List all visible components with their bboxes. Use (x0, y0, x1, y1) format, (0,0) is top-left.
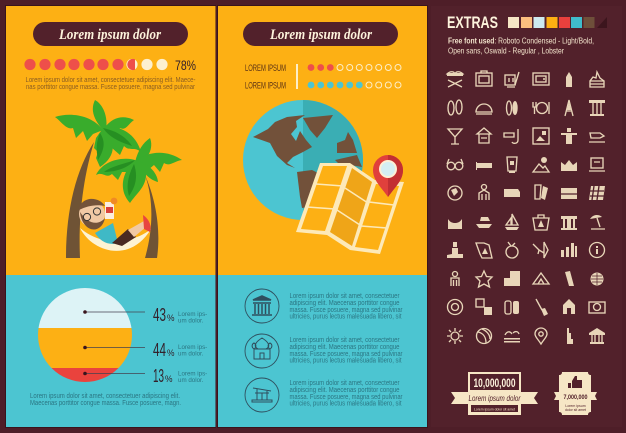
illustration: palm trees and hammock (55, 100, 182, 258)
callout 43%: um dolor. (178, 318, 204, 324)
icon: swimmer (504, 332, 520, 342)
heading pill middle (243, 22, 398, 46)
intro text: Lorem ipsum dolor sit amet, consectetuer adipiscing elit. Maece- (26, 77, 196, 84)
icon: bed (476, 162, 492, 170)
badge: 7,000,000 thumbs up: Lorem ipsum (565, 404, 586, 408)
feature row: torii gate: massa. Fusce posuere, magna sed pulvinar (290, 394, 403, 401)
icon: hotel (560, 188, 578, 199)
icon: photo (533, 128, 549, 144)
callout 43%: Lorem ips- (178, 311, 207, 318)
pie caption (30, 393, 181, 407)
feature row: temple: adipiscing elit. Maecenas porttitor congue (290, 300, 400, 307)
callout 44% (83, 340, 207, 360)
font note: Free font used: Roboto Condensed - Light/Bold, (448, 36, 594, 46)
icon: camera (589, 302, 605, 313)
heading pill left (33, 22, 188, 46)
badge: 7,000,000 thumbs up: 7,000,000 (564, 394, 588, 401)
icon: torii (561, 216, 577, 230)
intro text (26, 77, 196, 91)
icon: column (589, 100, 605, 116)
icon: apartment block (504, 271, 520, 286)
progress dots 78% (24, 57, 196, 73)
icon: starfish (476, 271, 492, 287)
icon: tent (533, 273, 549, 284)
icon: sunscreen (507, 157, 517, 173)
icon: sandals (506, 101, 518, 115)
callout 13%: Lorem ips- (178, 370, 207, 378)
heading pill middle: Lorem ipsum dolor (269, 27, 372, 43)
callout 44%: um dolor. (178, 350, 204, 358)
icon: church (563, 299, 575, 314)
feature row: temple (245, 289, 403, 323)
icon: dice (476, 299, 492, 315)
icon: hut (477, 128, 491, 143)
icon: boat on water (589, 133, 605, 142)
icon grid (447, 71, 605, 344)
icon: road sign (536, 299, 548, 316)
pie chart (38, 288, 132, 383)
icon: life ring (448, 300, 462, 314)
feature row: torii gate: ultricies, purus lectus malesuada libero, sit (290, 400, 402, 408)
dot rating rows: LOREM IPSUM (245, 63, 286, 73)
icon: safe (533, 73, 549, 85)
man (79, 198, 151, 246)
callout 43%: 43 (153, 305, 166, 325)
progress dots 78%: 78% (175, 57, 196, 73)
icon: cards (476, 243, 492, 258)
feature row: cathedral: massa. Fusce posuere, magna sed pulvinar (290, 351, 403, 358)
icon: liberty statue (567, 328, 573, 344)
callout 44%: % (167, 348, 174, 358)
intro text: nas porttitor congue massa. Fusce posuere, magna sed pulvinar (26, 84, 196, 91)
icon: location pin (373, 155, 403, 197)
icon: globe pin (448, 186, 462, 200)
callout 43% (83, 305, 207, 325)
feature row: torii gate: Lorem ipsum dolor sit amet, consectetuer (290, 380, 400, 387)
icon: worker (451, 272, 459, 286)
icon: eiffel tower (565, 100, 573, 116)
feature row: temple: ultricies, purus lectus malesuada libero, sit (290, 314, 402, 320)
badge: 7,000,000 thumbs up: dolor sit amet (565, 408, 586, 412)
callout 13%: 13 (153, 366, 164, 386)
callout 43%: % (167, 313, 174, 323)
icon: cocktail (448, 129, 462, 144)
panel: middle (217, 5, 428, 428)
callout 44%: 44 (153, 340, 166, 360)
icon: tickets (535, 185, 548, 200)
callout 13%: um dolor. (178, 377, 204, 384)
dot rating rows: LOREM IPSUM (245, 80, 286, 90)
feature row: temple: massa. Fusce posuere, magna sed pulvinar (290, 307, 403, 314)
icon: beach umbrella (590, 215, 605, 229)
icon: globe (590, 272, 604, 286)
icon: flip flops (448, 100, 462, 115)
feature row: cathedral: adipiscing elit. Maecenas porttitor congue (290, 344, 400, 351)
icon: bus (504, 189, 520, 197)
callout 13% (83, 366, 207, 386)
icon: castle (561, 160, 577, 171)
panel: extras (431, 6, 622, 427)
badge: 10,000,000: Lorem ipsum dolor (468, 394, 521, 403)
icon: palace (590, 72, 604, 87)
feature row: cathedral: ultricies, purus lectus malesuada libero, sit (290, 358, 402, 364)
callout 13%: % (165, 374, 172, 384)
hammock (80, 228, 151, 251)
icon: diving tanks (505, 301, 519, 314)
icon: snorkel (504, 129, 518, 143)
icon: glasses (447, 159, 463, 170)
extras heading: EXTRAS (447, 14, 498, 32)
badge: 7,000,000 thumbs up (554, 372, 597, 415)
icon: mosque (448, 219, 462, 229)
feature row: cathedral: Lorem ipsum dolor sit amet, consectetuer (290, 337, 400, 344)
callout 44%: Lorem ips- (178, 344, 207, 351)
icon: luggage cart (505, 72, 519, 87)
badge: 10,000,000 (451, 372, 538, 415)
pie caption: Maecenas porttitor congue massa. Fusce posuere, magn. (30, 400, 181, 407)
panel: left (5, 5, 216, 428)
icon: laptop (589, 158, 605, 171)
feature row: torii gate (245, 378, 403, 412)
icon: beach ball (476, 328, 492, 344)
feature row: torii gate: adipiscing elit. Maecenas porttitor congue (290, 387, 400, 394)
feature row: temple: Lorem ipsum dolor sit amet, consectetuer (290, 293, 400, 300)
colour swatches (508, 17, 607, 28)
font note (448, 36, 594, 56)
feature row: cathedral (245, 334, 403, 368)
icon: map marker (535, 328, 547, 344)
icon: fruit (506, 242, 518, 258)
dot rating rows (245, 63, 401, 90)
icon: guard (447, 242, 463, 258)
icon: plate and cutlery (533, 102, 549, 114)
icon: sun (447, 328, 463, 344)
font note: Open sans, Oswald - Regular , Lobster (448, 46, 564, 56)
icon: christ statue (561, 128, 577, 144)
icon: temple (589, 328, 605, 344)
icon: cruise ship (476, 217, 492, 228)
icon: person (479, 184, 489, 200)
icon: city buildings (561, 243, 577, 257)
icon: fish (533, 242, 548, 258)
icon: mountains (533, 157, 549, 172)
icon: suitcase (476, 71, 492, 86)
heading pill left: Lorem ipsum dolor (58, 27, 161, 43)
icon: tower (566, 72, 572, 87)
badge: 10,000,000: 10,000,000 (474, 376, 516, 390)
pie caption: Lorem ipsum dolor sit amet, consectetuer adipiscing elit. (30, 393, 180, 400)
icon: pisa tower (565, 271, 574, 286)
icon: palm beach (447, 72, 463, 87)
badge: 10,000,000: Lorem ipsum dolor sit amet (474, 406, 516, 412)
icon: map grid (589, 186, 605, 200)
icon: info (590, 242, 604, 258)
icon: sailboat (505, 214, 519, 230)
icon: food cloche (476, 104, 492, 114)
icon: shopping bag (533, 215, 549, 230)
illustration: globe (243, 100, 363, 220)
illustration: folded map (296, 163, 404, 254)
